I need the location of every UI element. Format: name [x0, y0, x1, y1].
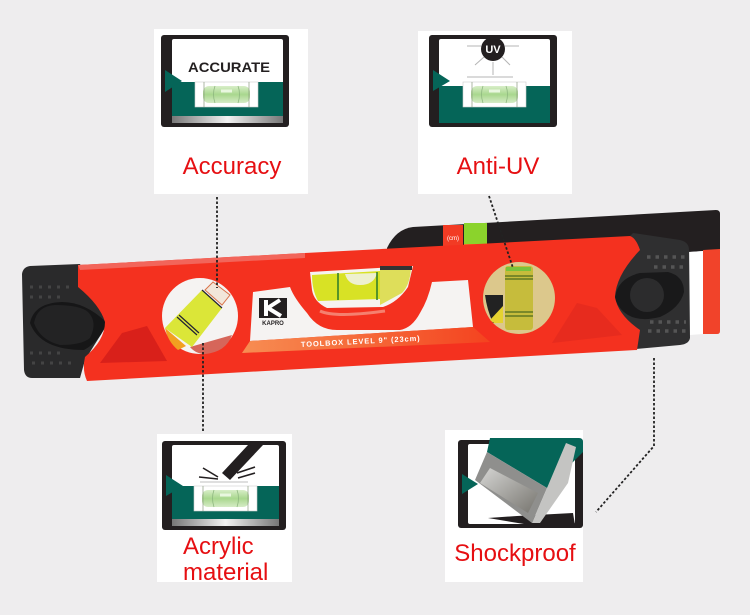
- icon: impact level: [162, 441, 286, 530]
- arch opening: [310, 266, 413, 308]
- right grip groove: [615, 272, 684, 319]
- grip dots: [30, 287, 72, 363]
- packaging card behind level: [387, 210, 720, 335]
- callout line: acrylic: [202, 343, 204, 432]
- label: Acrylic material: material: [183, 559, 268, 586]
- orange band: [242, 327, 490, 353]
- label: Acrylic material: Acrylic: [183, 533, 254, 560]
- label: Accuracy: Accuracy: [183, 153, 281, 180]
- icon: accurate level: ACCURATE: [188, 59, 270, 75]
- label: Shockproof: Shockproof: [454, 540, 576, 567]
- tilted vial left: [165, 282, 230, 350]
- callout line: shockproof: [596, 358, 654, 512]
- left inset triangle: [100, 326, 167, 363]
- left grip groove: [30, 302, 106, 350]
- left rubber cap: [22, 264, 110, 378]
- band text: TOOLBOX LEVEL 9" (23cm): [301, 334, 421, 349]
- center handle lip: [320, 311, 385, 314]
- left window: [162, 278, 238, 354]
- logo: KAPRO: [262, 321, 284, 327]
- white label panel: [250, 280, 473, 341]
- callout line: accuracy: [216, 197, 218, 288]
- center vial: [312, 266, 412, 305]
- icon: accurate level: [161, 35, 289, 127]
- logo: [259, 298, 287, 327]
- icon: uv level: [429, 35, 557, 127]
- right rubber cap: [605, 233, 690, 349]
- panel: anti-uv: [418, 31, 572, 194]
- callout line: anti-uv: [489, 196, 513, 268]
- panel: acrylic material: [157, 434, 292, 586]
- packaging card behind level: (cm): [447, 236, 459, 242]
- pink top stripe: [78, 253, 305, 270]
- left grip oval: [34, 305, 94, 345]
- icon: shock level: [458, 438, 583, 528]
- icon: uv level: UV: [485, 44, 501, 56]
- right window: [483, 262, 555, 334]
- red body: [78, 236, 640, 381]
- panel: shockproof: [445, 430, 583, 582]
- panel: accuracy: [154, 29, 308, 194]
- label: Anti-UV: Anti-UV: [457, 153, 539, 180]
- toolbox level: [22, 233, 690, 381]
- right inset triangle: [552, 303, 622, 343]
- right grip knob: [630, 278, 664, 312]
